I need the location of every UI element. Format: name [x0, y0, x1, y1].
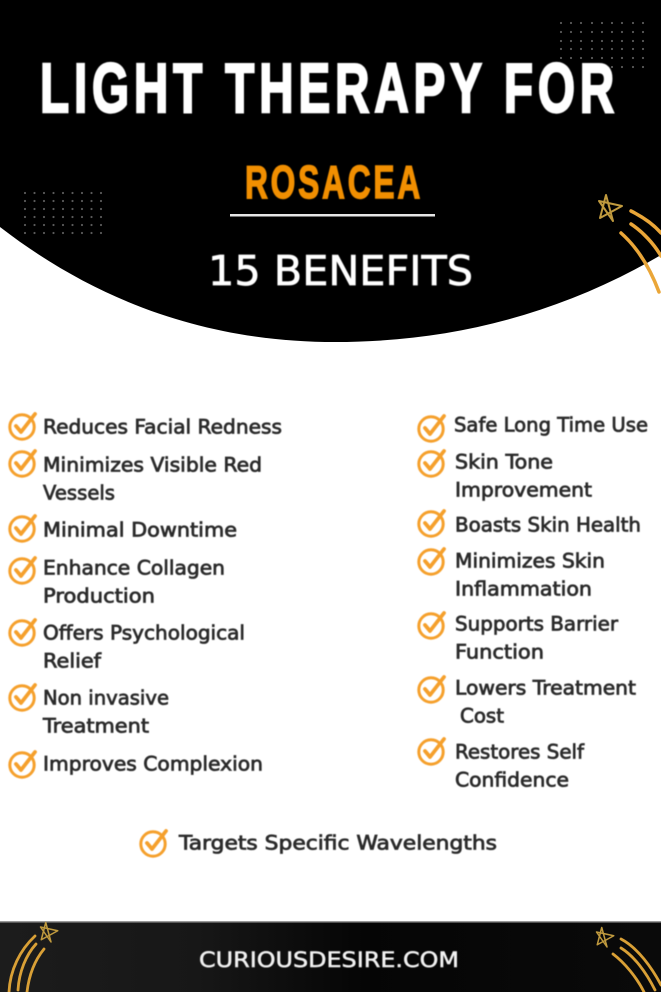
benefit 12: Supports Barrier [455, 613, 619, 636]
benefit 10: Boasts Skin Health [455, 514, 641, 537]
benefit 2: Vessels [43, 482, 115, 505]
benefit 6: Non invasive [43, 687, 169, 710]
benefit 14: Confidence [455, 769, 569, 792]
benefit 5: Offers Psychological [43, 622, 245, 645]
benefit 13: Lowers Treatment [455, 677, 636, 700]
benefit 6: Treatment [42, 715, 149, 738]
dot pattern: top right [560, 22, 644, 68]
benefit 11: Inflammation [455, 578, 592, 601]
benefit 9: Skin Tone [455, 451, 553, 474]
heading: 15 benefits: 15 BENEFITS [208, 247, 473, 295]
benefit 13: Cost [460, 705, 504, 728]
benefit 1: Reduces Facial Redness [43, 416, 282, 439]
benefit 14: Restores Self [455, 741, 585, 764]
icon: shooting star footer right [596, 928, 661, 992]
benefit 12 [419, 613, 619, 664]
icon: shooting star footer left [9, 922, 58, 992]
subtitle: rosacea: ROSACEA [245, 156, 423, 208]
benefit 3: Minimal Downtime [43, 519, 237, 542]
benefit 2: Minimizes Visible Red [43, 454, 262, 477]
benefit 11 [419, 549, 605, 601]
benefit 13 [419, 677, 636, 728]
panel: header [0, 0, 661, 342]
benefit 4 [10, 557, 225, 608]
benefit 12: Function [455, 641, 544, 664]
benefit 2 [10, 451, 262, 505]
benefit 11: Minimizes Skin [455, 550, 605, 573]
benefit 5: Relief [43, 650, 102, 673]
panel: right benefits [419, 414, 648, 792]
dot pattern: left [24, 192, 102, 234]
divider line [230, 214, 435, 216]
benefit 5 [10, 620, 245, 673]
benefit 14 [419, 739, 585, 792]
panel: footer [0, 921, 661, 992]
benefit 9: Improvement [455, 479, 592, 502]
benefit 8: Safe Long Time Use [454, 414, 648, 437]
footer url: CURIOUSDESIRE.COM [199, 948, 459, 972]
benefit 4: Enhance Collagen [43, 557, 225, 580]
panel: left benefits [10, 414, 282, 777]
benefit 4: Production [43, 585, 155, 608]
icon: shooting star top [599, 195, 661, 292]
benefit 15: Targets Specific Wavelengths [178, 832, 497, 855]
benefit 6 [10, 685, 169, 738]
benefit 7: Improves Complexion [43, 753, 263, 776]
benefit 9 [419, 451, 592, 502]
